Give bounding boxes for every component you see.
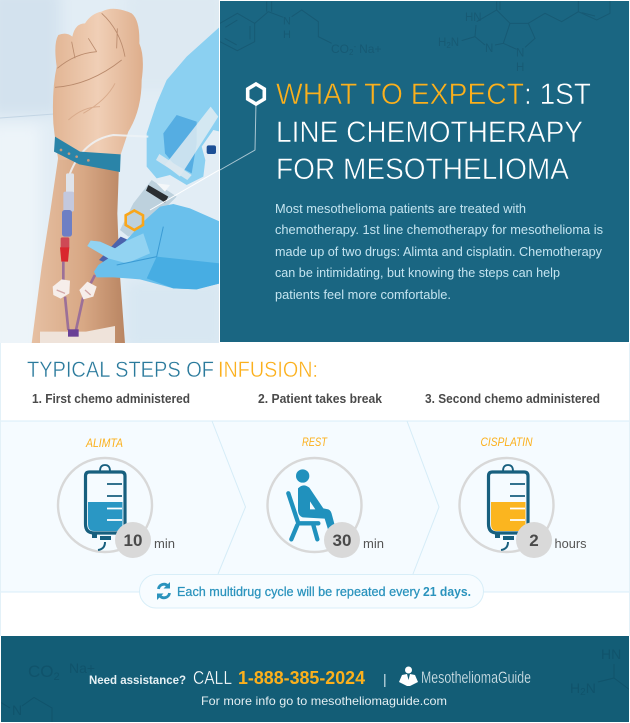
title: FOR MESOTHELIOMA xyxy=(276,153,569,186)
wristband xyxy=(54,137,121,172)
icon: iv bag orange xyxy=(488,465,528,550)
molecule background top xyxy=(220,0,610,74)
molecule label: - xyxy=(353,42,356,51)
intro text: Most mesothelioma patients are treated with xyxy=(275,202,526,216)
connector line xyxy=(220,102,256,170)
molecule label: N xyxy=(283,16,291,28)
callout text: 21 days. xyxy=(423,585,471,599)
icon: refresh xyxy=(157,582,170,600)
hand xyxy=(53,9,143,160)
icon: logo xyxy=(399,666,418,686)
icon: iv bag blue xyxy=(86,465,125,550)
title xyxy=(276,78,591,186)
label: rest: REST xyxy=(302,435,328,449)
circle xyxy=(460,458,554,552)
molecule label: N xyxy=(516,48,524,60)
circle xyxy=(268,458,362,552)
molecule label: 2 xyxy=(580,687,586,698)
website: For more info go to mesotheliomaguide.com xyxy=(201,694,447,708)
molecule label: H xyxy=(283,29,291,41)
panel: infusion steps band xyxy=(1,421,629,592)
separator: | xyxy=(383,671,387,687)
intro text: made up of two drugs: Alimta and cisplatin. Chemotherapy xyxy=(275,245,603,259)
title: : 1ST xyxy=(524,78,591,111)
clamps xyxy=(53,279,70,299)
phone number: 1-888-385-2024 xyxy=(238,668,365,688)
glove upper xyxy=(147,27,220,185)
icon: orange hexagon marker xyxy=(126,210,143,230)
icon: seated person xyxy=(288,469,336,539)
molecule label: 2 xyxy=(54,671,60,683)
molecule label: HN xyxy=(465,12,482,24)
molecule label: H xyxy=(516,62,524,74)
step titles xyxy=(32,392,600,406)
panel: intro xyxy=(220,0,629,342)
iv line and connectors xyxy=(66,173,74,193)
label: alimta: ALIMTA xyxy=(85,436,123,450)
heading: typical steps: INFUSION: xyxy=(218,357,318,382)
intro text: chemotherapy. 1st line chemotherapy for mesothelioma is xyxy=(275,223,603,237)
intro text: patients feel more comfortable. xyxy=(275,288,451,302)
iv tube xyxy=(69,134,148,174)
molecule label: 2 xyxy=(349,48,354,57)
molecule label: 2 xyxy=(446,41,451,50)
step titles: 2. Patient takes break xyxy=(258,392,382,406)
icon: white hexagon marker xyxy=(248,84,264,104)
badge: 2: 2 xyxy=(529,531,539,550)
heading: typical steps: TYPICAL STEPS OF xyxy=(27,357,214,382)
molecule label: HN xyxy=(601,646,621,662)
unit: min: min xyxy=(154,537,175,551)
molecule label: H xyxy=(438,37,446,49)
dressing xyxy=(40,326,115,343)
molecule label: H xyxy=(570,680,580,696)
panel: footer xyxy=(0,636,630,723)
molecule label: Na+ xyxy=(359,42,381,56)
step 1: alimta xyxy=(58,436,175,558)
intro text: can be intimidating, but knowing the steps can help xyxy=(275,266,560,280)
step titles: 1. First chemo administered xyxy=(32,392,190,406)
title: LINE CHEMOTHERAPY xyxy=(276,116,583,149)
badge: 10: 10 xyxy=(124,531,142,550)
unit: hours: hours xyxy=(554,537,586,551)
molecule label: N xyxy=(485,43,493,55)
molecule label: Na+ xyxy=(69,660,95,676)
page edges xyxy=(0,343,630,636)
need assistance: Need assistance? xyxy=(89,675,186,687)
intro text xyxy=(275,202,603,302)
photo: arm receiving infusion xyxy=(0,0,225,355)
title: WHAT TO EXPECT xyxy=(276,78,524,111)
molecule label: CO xyxy=(331,42,349,56)
callout text: Each multidrug cycle will be repeated every xyxy=(177,585,421,599)
circle xyxy=(58,458,152,552)
call: CALL xyxy=(193,668,232,688)
label: cisplatin: CISPLATIN xyxy=(480,435,533,449)
step 2: rest xyxy=(268,435,384,558)
callout: cycle repeat xyxy=(140,574,484,608)
step titles: 3. Second chemo administered xyxy=(425,392,600,406)
molecule label: N xyxy=(451,37,459,49)
molecule label: N xyxy=(586,680,596,696)
forearm xyxy=(32,155,125,343)
molecule background footer xyxy=(0,646,630,723)
syringe xyxy=(165,107,218,177)
brand name: MesotheliomaGuide xyxy=(421,668,531,687)
glove lower xyxy=(87,204,220,289)
step 3: cisplatin xyxy=(460,435,586,558)
photo connector line xyxy=(150,170,219,210)
molecule label: CO xyxy=(28,662,54,681)
badge: 30: 30 xyxy=(333,531,351,550)
molecule label: N xyxy=(12,702,22,718)
unit: min: min xyxy=(363,537,384,551)
